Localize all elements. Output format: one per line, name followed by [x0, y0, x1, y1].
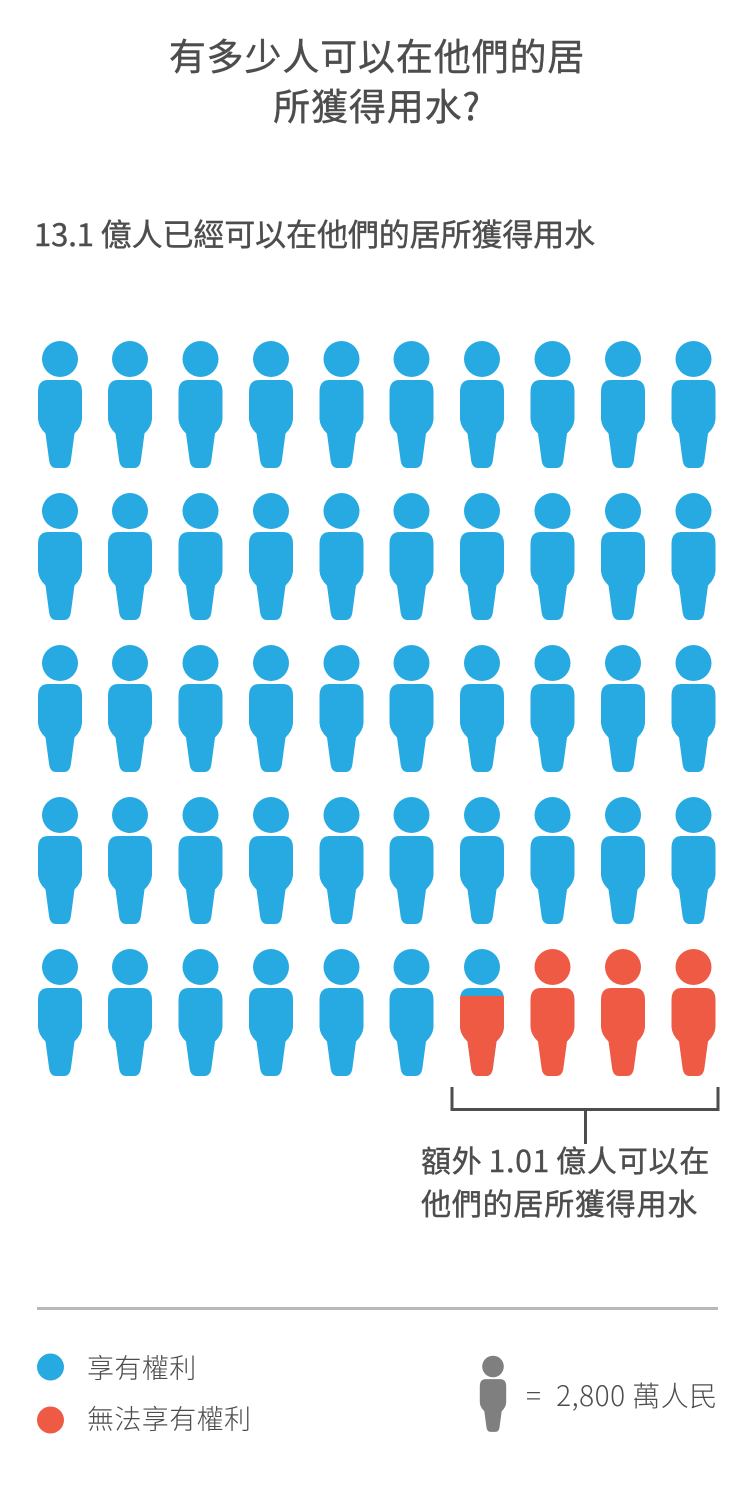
pictogram chart: [37, 341, 720, 1434]
title: 所獲得用水?: [273, 77, 481, 131]
legend dot: red: [37, 1406, 64, 1434]
icon: grey person: [480, 1356, 506, 1432]
row 2 of people: [38, 493, 716, 620]
legend label: no right: 無法享有權利: [87, 1398, 251, 1437]
title: 有多少人可以在他們的居: [169, 27, 585, 81]
row 5 of people: blue: [38, 949, 504, 1076]
title: [169, 27, 585, 131]
row 1 of people: [38, 341, 716, 468]
annotation: 額外 1.01 億人可以在: [421, 1137, 710, 1181]
annotation: 他們的居所獲得用水: [421, 1180, 698, 1224]
annotation: [421, 1137, 710, 1224]
legend divider: [37, 1307, 718, 1310]
row 4 of people: [38, 797, 716, 924]
legend dot: blue: [37, 1354, 64, 1380]
bracket: [452, 1087, 718, 1144]
subtitle: 13.1 億人已經可以在他們的居所獲得用水: [34, 210, 595, 255]
scale label: = 2,800 萬人民: [526, 1375, 718, 1415]
row 5 of people: red: [530, 949, 716, 1076]
partially red person: [460, 996, 504, 1076]
legend label: has right: 享有權利: [87, 1347, 197, 1386]
row 3 of people: [38, 645, 716, 772]
